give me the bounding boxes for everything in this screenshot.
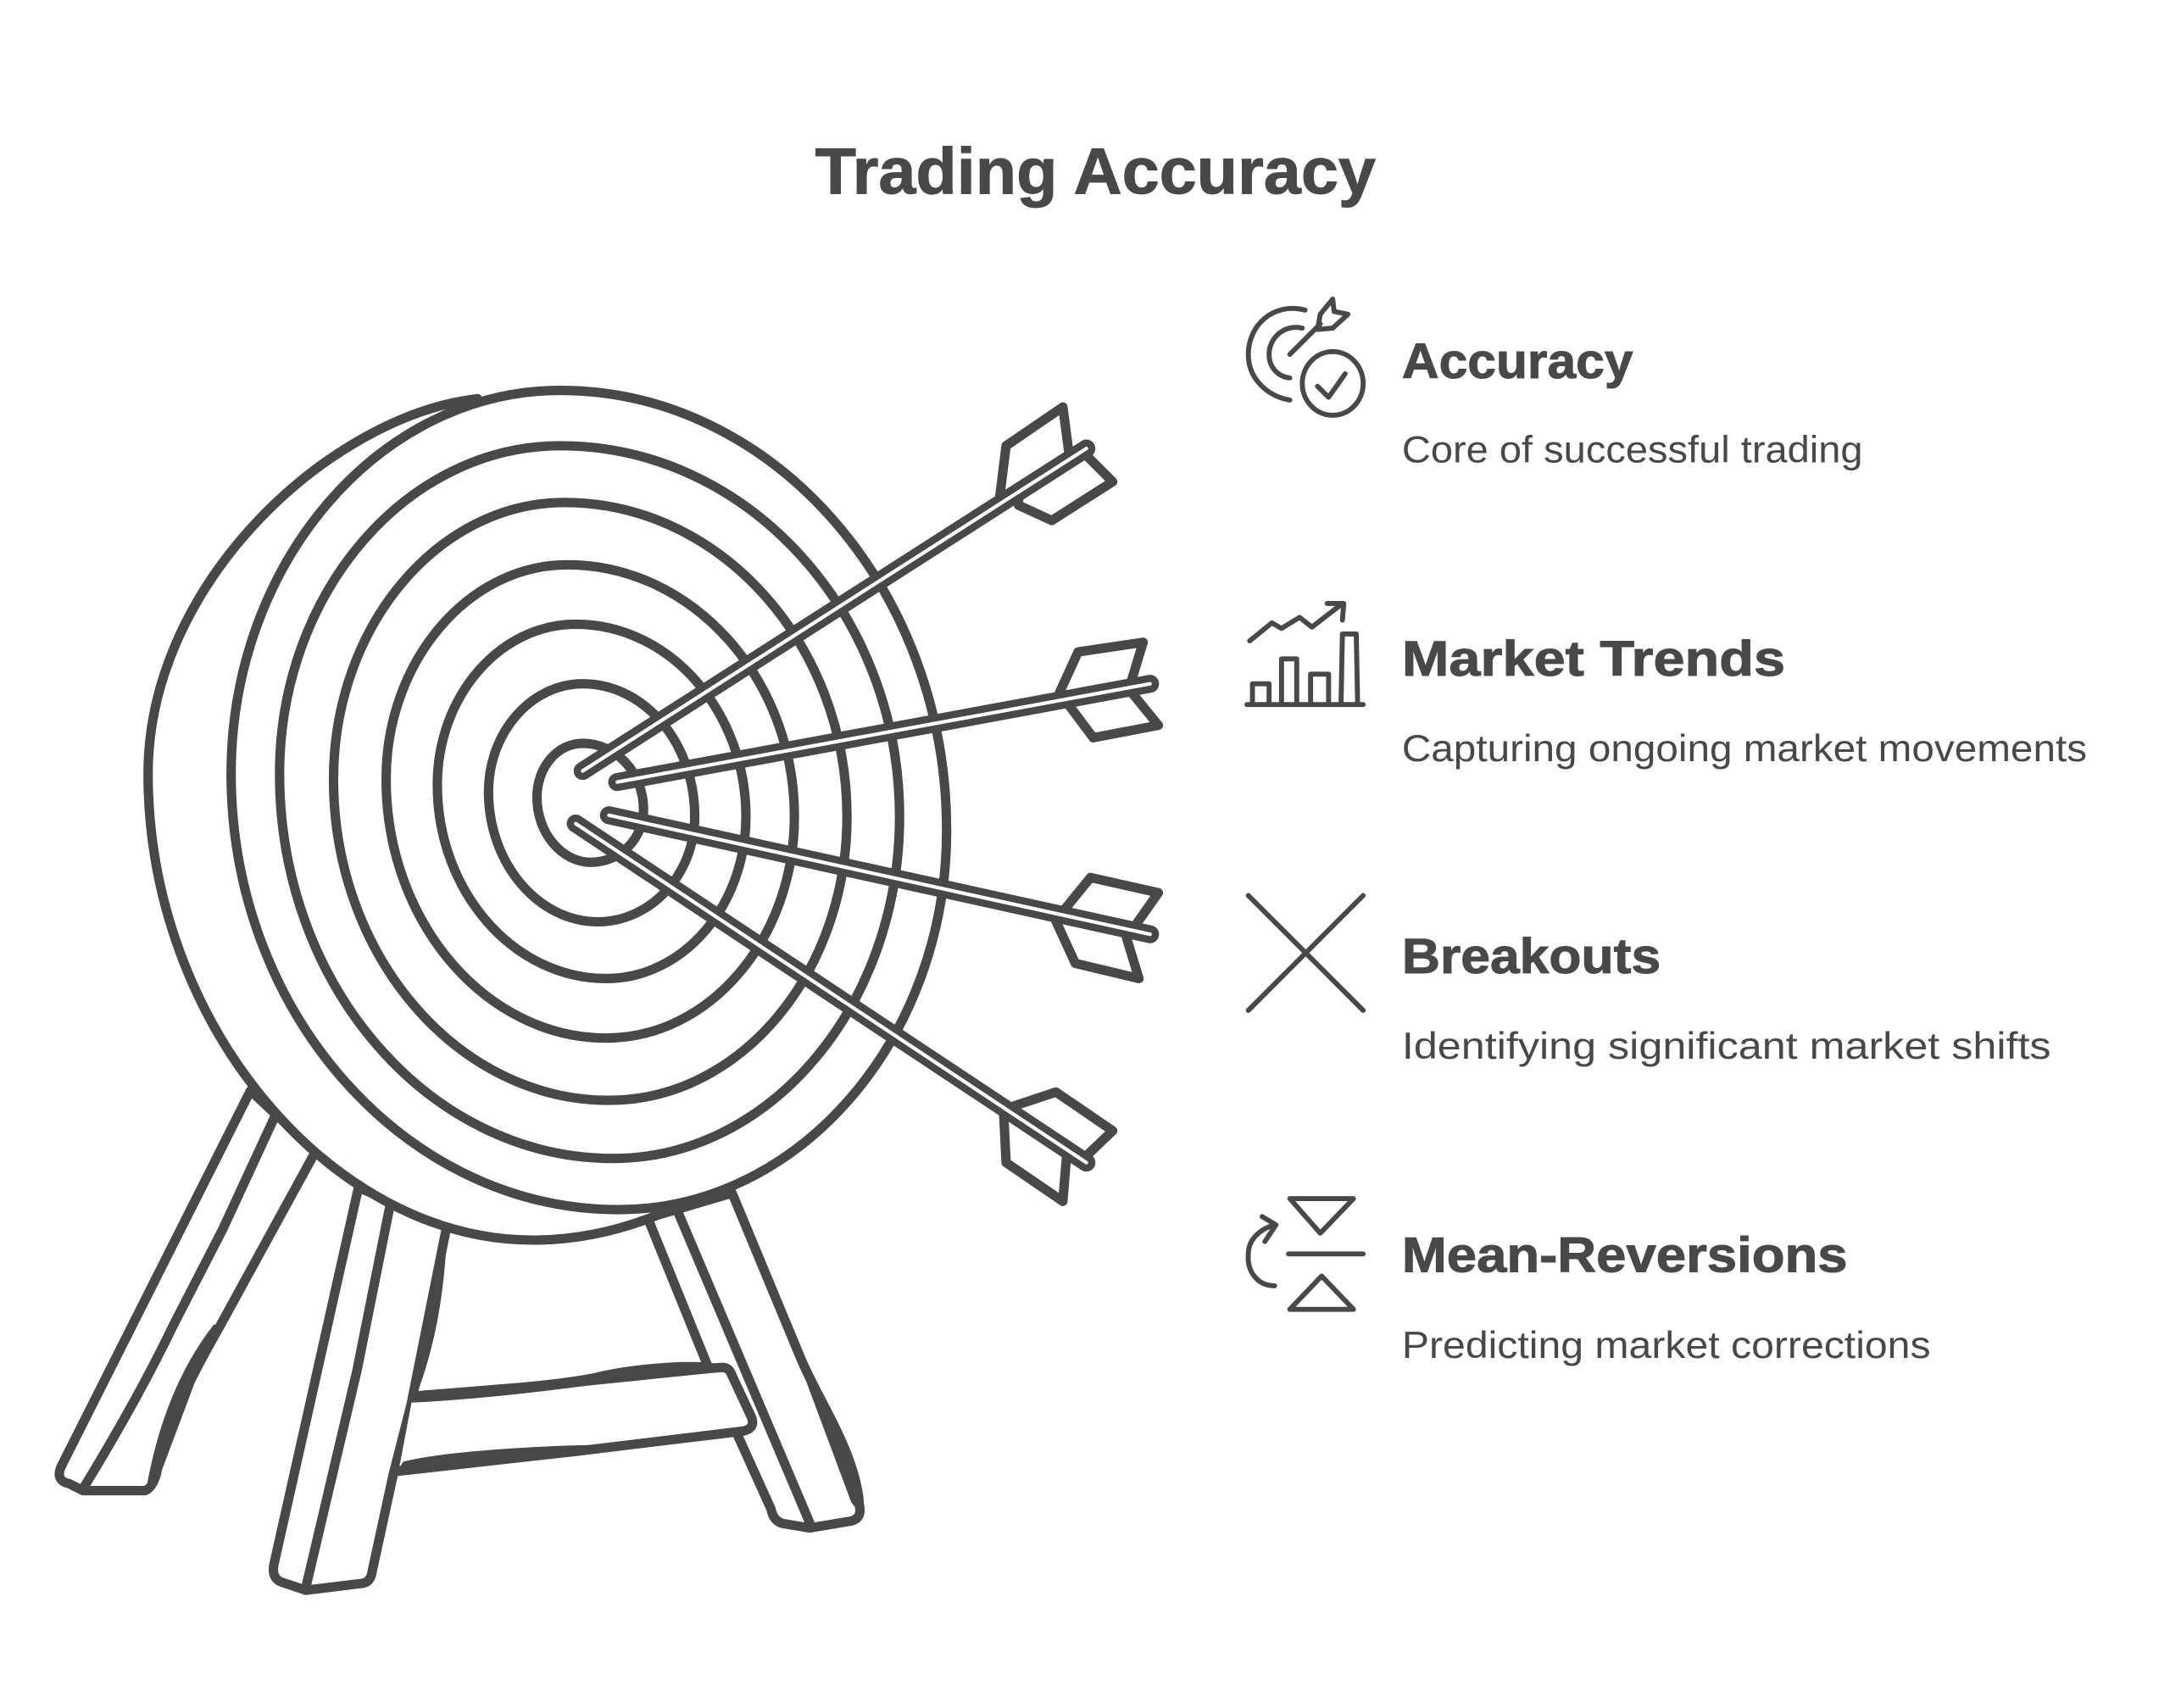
- icon: target with arrow and check: [1249, 299, 1363, 415]
- arrow: upper: [582, 407, 1113, 771]
- crossbar: [398, 1363, 753, 1472]
- heading: Accuracy: [1402, 334, 1633, 389]
- target stand: [59, 1091, 860, 1590]
- item: Mean-Reversions: [1248, 1199, 1931, 1366]
- middle leg: [274, 1188, 447, 1590]
- target back edge: [148, 398, 658, 1240]
- icon: crossing lines: [1249, 895, 1363, 1010]
- description: Identifying significant market shifts: [1402, 1026, 2051, 1067]
- item: Accuracy: [1249, 299, 1863, 470]
- item: Breakouts: [1249, 895, 2051, 1067]
- description: Predicting market corrections: [1402, 1325, 1931, 1366]
- description: Capturing ongoing market movements: [1402, 728, 2087, 770]
- heading: Breakouts: [1402, 929, 1661, 984]
- description: Core of successful trading: [1402, 429, 1863, 470]
- illustration: archery target on stand with arrows: [59, 391, 1159, 1590]
- target rings: [231, 391, 947, 1210]
- heading: Mean-Reversions: [1402, 1228, 1848, 1283]
- left leg: [59, 1091, 315, 1491]
- icon: bar chart with rising arrow: [1247, 604, 1363, 704]
- title: Trading Accuracy: [815, 136, 1376, 209]
- arrow: lower middle: [609, 815, 1159, 978]
- heading: Market Trends: [1402, 631, 1785, 687]
- arrow: lower: [576, 824, 1113, 1201]
- icon: triangles around mean line with return arrow: [1248, 1199, 1363, 1310]
- right leg: [648, 1193, 860, 1528]
- arrow: upper middle: [617, 643, 1159, 782]
- item: Market Trends: [1247, 604, 2087, 770]
